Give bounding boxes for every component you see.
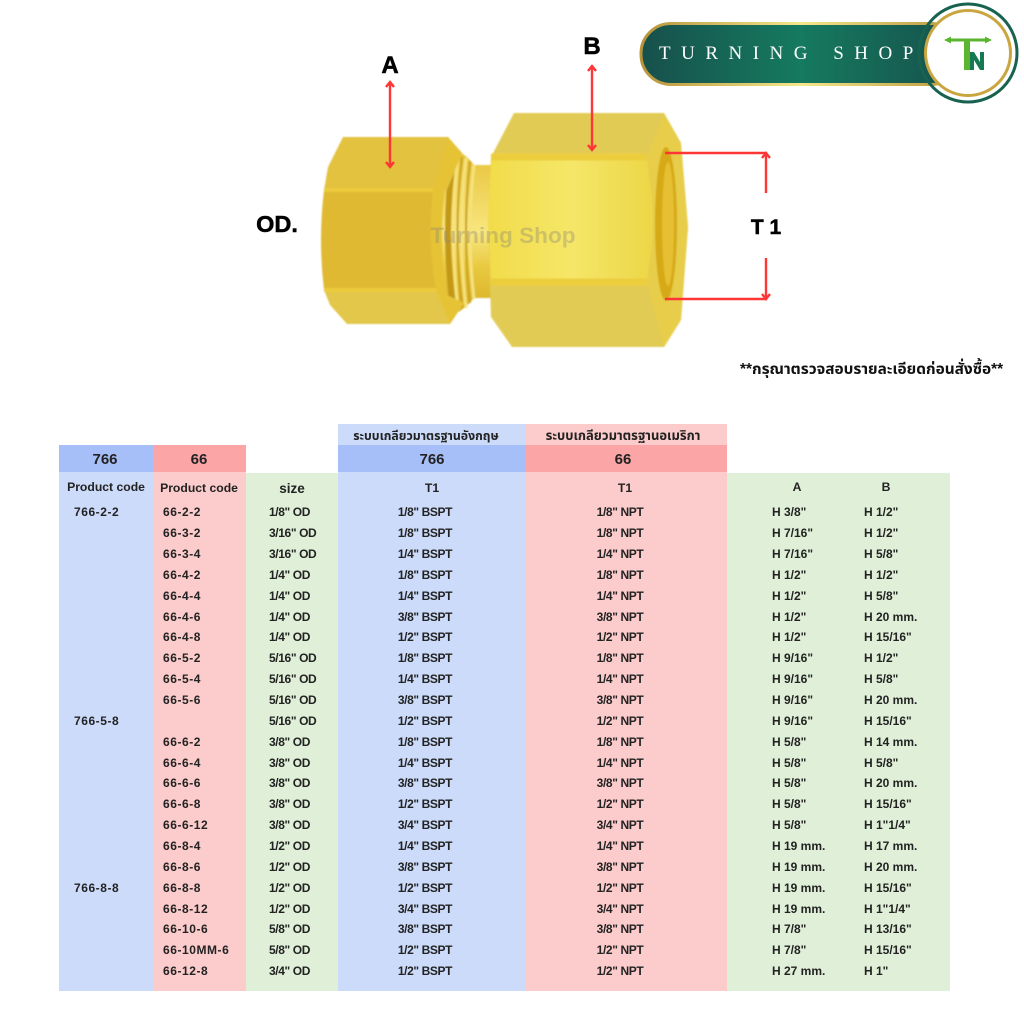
label T1: T 1 (751, 216, 781, 239)
column: A and B dimensions: H 5/8" (772, 818, 806, 832)
column: 66 product code: 66-4-8 (163, 630, 201, 644)
column: size: 3/8" OD (269, 776, 311, 790)
watermark: Turning Shop (430, 223, 576, 248)
column: 766 T1 BSPT: 1/2" BSPT (398, 881, 453, 895)
threaded neck (440, 150, 492, 314)
column: 66 T1 NPT: ระบบเกลียวมาตรฐานอเมริกา (546, 428, 700, 443)
right nut (488, 113, 688, 347)
column: 66 T1 NPT: 1/2" NPT (597, 964, 644, 978)
column: A and B dimensions: H 1/2" (864, 526, 898, 540)
column: A and B dimensions: H 20 mm. (864, 693, 917, 707)
column: 66 product code: 66-6-2 (163, 735, 201, 749)
column: 766 T1 BSPT: 1/4" BSPT (398, 756, 453, 770)
column: 66 T1 NPT: 1/2" NPT (597, 943, 644, 957)
column: A and B dimensions: H 9/16" (772, 672, 813, 686)
label A: A (381, 52, 399, 79)
column: 766 T1 BSPT: 1/2" BSPT (398, 630, 453, 644)
column: 766 T1 BSPT: 1/4" BSPT (398, 839, 453, 853)
column: A and B dimensions: H 15/16" (864, 943, 912, 957)
column: 66 T1 NPT: 1/2" NPT (597, 797, 644, 811)
column: 66 product code: 66-10-6 (163, 922, 208, 936)
column: 66 product code: 66-6-6 (163, 776, 201, 790)
column: size: 3/4" OD (269, 964, 311, 978)
column: 66 product code (153, 445, 246, 991)
column: A and B dimensions: H 1"1/4" (864, 818, 911, 832)
logo emblem (919, 4, 1017, 102)
column: A and B dimensions: H 5/8" (864, 547, 898, 561)
column: A and B dimensions: H 1/2" (864, 505, 898, 519)
column: 66 product code: 66-8-6 (163, 860, 201, 874)
column: 766 T1 BSPT: 1/8" BSPT (398, 651, 453, 665)
column: 66 product code: 66-5-4 (163, 672, 201, 686)
column: 66 product code: 66-10MM-6 (163, 943, 229, 957)
column: 66 T1 NPT: 1/4" NPT (597, 839, 644, 853)
column: 66 T1 NPT: 3/8" NPT (597, 860, 644, 874)
column: 766 product code: Product code (67, 480, 145, 494)
column: A and B dimensions: H 20 mm. (864, 610, 917, 624)
column: A and B dimensions: H 17 mm. (864, 839, 917, 853)
column: 766 T1 BSPT: 1/8" BSPT (398, 505, 453, 519)
column: A and B dimensions: H 20 mm. (864, 860, 917, 874)
column: A and B dimensions: H 19 mm. (772, 902, 825, 916)
column: 66 product code: 66-8-4 (163, 839, 201, 853)
column: A and B dimensions: H 1" (864, 964, 888, 978)
column: A and B dimensions: H 13/16" (864, 922, 912, 936)
column: size: 3/16" OD (269, 547, 317, 561)
column: 66 product code: Product code (160, 481, 238, 495)
column: 66 T1 NPT: 1/2" NPT (597, 630, 644, 644)
column: 66 product code: 66-6-4 (163, 756, 201, 770)
column: A and B dimensions: B (882, 480, 891, 494)
column: 66 T1 NPT: T1 (618, 481, 632, 495)
column: size: 1/4" OD (269, 630, 311, 644)
column: 66 T1 NPT: 3/8" NPT (597, 610, 644, 624)
column: A and B dimensions: H 1/2" (772, 568, 806, 582)
left nut (321, 137, 464, 324)
column: size: size (279, 481, 305, 496)
column: 766 T1 BSPT: T1 (425, 481, 439, 495)
column: 766 T1 BSPT: 3/4" BSPT (398, 902, 453, 916)
column: 766 T1 BSPT: ระบบเกลียวมาตรฐานอังกฤษ (353, 429, 499, 443)
column: A and B dimensions: H 1/2" (772, 610, 806, 624)
column: 66 T1 NPT: 1/8" NPT (597, 735, 644, 749)
column: 766 product code: 766-2-2 (74, 505, 119, 519)
column: 766 T1 BSPT: 1/2" BSPT (398, 714, 453, 728)
column: 66 T1 NPT: 1/8" NPT (597, 651, 644, 665)
logo (641, 4, 1017, 102)
column: 766 T1 BSPT: 766 (419, 451, 445, 468)
column: 766 T1 BSPT: 1/8" BSPT (398, 735, 453, 749)
column: 766 product code: 766 (92, 451, 118, 468)
column: size: 1/4" OD (269, 610, 311, 624)
column: A and B dimensions: H 19 mm. (772, 860, 825, 874)
column: A and B dimensions: H 1/2" (864, 651, 898, 665)
column: 766 T1 BSPT: 3/8" BSPT (398, 610, 453, 624)
column: A and B dimensions: H 5/8" (772, 735, 806, 749)
column: A and B dimensions: H 15/16" (864, 881, 912, 895)
column: 766 T1 BSPT: 3/8" BSPT (398, 776, 453, 790)
column: 766 T1 BSPT (338, 424, 525, 991)
column: 766 T1 BSPT: 1/4" BSPT (398, 547, 453, 561)
column: 66 product code: 66-5-2 (163, 651, 201, 665)
column: 766 T1 BSPT: 1/8" BSPT (398, 568, 453, 582)
column: size: 1/2" OD (269, 860, 311, 874)
column: 66 product code: 66-8-12 (163, 902, 208, 916)
label B: B (583, 33, 601, 60)
column: A and B dimensions: H 1/2" (772, 589, 806, 603)
column: A and B dimensions: H 14 mm. (864, 735, 917, 749)
column: 66 product code: 66-2-2 (163, 505, 201, 519)
column: 766 T1 BSPT: 1/8" BSPT (398, 526, 453, 540)
column: size: 1/2" OD (269, 839, 311, 853)
column: A and B dimensions: H 15/16" (864, 630, 912, 644)
logo pill (641, 24, 961, 84)
column: size: 1/2" OD (269, 881, 311, 895)
column: 766 T1 BSPT: 3/8" BSPT (398, 922, 453, 936)
column: size: 1/4" OD (269, 568, 311, 582)
column: A and B dimensions: H 19 mm. (772, 881, 825, 895)
arrow T1 (665, 153, 770, 299)
column: size: 3/8" OD (269, 797, 311, 811)
column: 766 T1 BSPT: 1/4" BSPT (398, 589, 453, 603)
column: A and B dimensions: H 7/16" (772, 547, 813, 561)
logo text: TURNING SHOP (659, 43, 924, 64)
column: 66 product code: 66-3-2 (163, 526, 201, 540)
column: A and B dimensions: H 7/8" (772, 922, 806, 936)
column: A and B dimensions: H 19 mm. (772, 839, 825, 853)
column: 66 T1 NPT: 1/4" NPT (597, 672, 644, 686)
column: 66 product code: 66-4-2 (163, 568, 201, 582)
column: A and B dimensions: H 7/8" (772, 943, 806, 957)
column: A and B dimensions: H 7/16" (772, 526, 813, 540)
column: A and B dimensions: H 5/8" (864, 672, 898, 686)
column: A and B dimensions: H 3/8" (772, 505, 806, 519)
column: A and B dimensions: H 27 mm. (772, 964, 825, 978)
column: 66 product code: 66-5-6 (163, 693, 201, 707)
column: size: 5/16" OD (269, 651, 317, 665)
column: 766 T1 BSPT: 1/2" BSPT (398, 943, 453, 957)
column: size: 1/8" OD (269, 505, 311, 519)
column: size: 5/8" OD (269, 922, 311, 936)
label OD: OD. (256, 211, 298, 237)
column: 66 T1 NPT: 1/8" NPT (597, 568, 644, 582)
column: A and B dimensions: H 1/2" (864, 568, 898, 582)
column: 66 product code: 66-6-8 (163, 797, 201, 811)
column: 66 T1 NPT: 1/2" NPT (597, 881, 644, 895)
column: size: 1/2" OD (269, 902, 311, 916)
column: A and B dimensions: H 1"1/4" (864, 902, 911, 916)
column: 766 product code: 766-8-8 (74, 881, 119, 895)
column: 766 product code (59, 445, 153, 991)
table (59, 424, 950, 991)
column: 66 T1 NPT: 3/8" NPT (597, 776, 644, 790)
column: A and B dimensions: H 9/16" (772, 714, 813, 728)
column: 66 T1 NPT: 3/8" NPT (597, 922, 644, 936)
column: 66 T1 NPT: 1/8" NPT (597, 505, 644, 519)
column: A and B dimensions: H 20 mm. (864, 776, 917, 790)
column: 66 T1 NPT: 1/4" NPT (597, 589, 644, 603)
column: 66 product code: 66-6-12 (163, 818, 208, 832)
column: 66 product code: 66-8-8 (163, 881, 201, 895)
column: 766 T1 BSPT: 3/8" BSPT (398, 860, 453, 874)
column: 766 T1 BSPT: 1/2" BSPT (398, 964, 453, 978)
column: A and B dimensions: A (793, 480, 802, 494)
column: size: 3/16" OD (269, 526, 317, 540)
column: 766 product code: 766-5-8 (74, 714, 119, 728)
column: A and B dimensions: H 5/8" (864, 589, 898, 603)
column: 66 T1 NPT: 3/4" NPT (597, 902, 644, 916)
column: 766 T1 BSPT: 3/4" BSPT (398, 818, 453, 832)
column: size (246, 473, 338, 991)
column: 66 T1 NPT: 1/4" NPT (597, 547, 644, 561)
column: size: 3/8" OD (269, 818, 311, 832)
column: size: 5/16" OD (269, 693, 317, 707)
column: size: 5/8" OD (269, 943, 311, 957)
column: A and B dimensions (727, 473, 950, 991)
column: 66 T1 NPT (525, 424, 727, 991)
column: A and B dimensions: H 1/2" (772, 630, 806, 644)
column: 66 T1 NPT: 66 (615, 451, 631, 468)
arrow B (588, 66, 596, 150)
column: 66 T1 NPT: 1/2" NPT (597, 714, 644, 728)
fitting photo (321, 113, 688, 347)
note: **กรุณาตรวจสอบรายละเอียดก่อนสั่งซื้อ** (740, 358, 1003, 378)
column: A and B dimensions: H 15/16" (864, 797, 912, 811)
column: size: 1/4" OD (269, 589, 311, 603)
column: size: 5/16" OD (269, 714, 317, 728)
column: size: 3/8" OD (269, 756, 311, 770)
column: size: 5/16" OD (269, 672, 317, 686)
column: 66 product code: 66 (191, 451, 207, 468)
column: A and B dimensions: H 9/16" (772, 693, 813, 707)
column: 66 product code: 66-3-4 (163, 547, 201, 561)
column: 66 T1 NPT: 3/4" NPT (597, 818, 644, 832)
column: 66 T1 NPT: 1/4" NPT (597, 756, 644, 770)
column: A and B dimensions: H 15/16" (864, 714, 912, 728)
column: 66 T1 NPT: 1/8" NPT (597, 526, 644, 540)
arrow A (386, 82, 394, 167)
column: 66 T1 NPT: 3/8" NPT (597, 693, 644, 707)
column: A and B dimensions: H 5/8" (772, 797, 806, 811)
column: 766 T1 BSPT: 3/8" BSPT (398, 693, 453, 707)
column: A and B dimensions: H 5/8" (772, 776, 806, 790)
column: size: 3/8" OD (269, 735, 311, 749)
column: 766 T1 BSPT: 1/2" BSPT (398, 797, 453, 811)
column: 66 product code: 66-4-6 (163, 610, 201, 624)
column: 766 T1 BSPT: 1/4" BSPT (398, 672, 453, 686)
column: A and B dimensions: H 9/16" (772, 651, 813, 665)
column: 66 product code: 66-12-8 (163, 964, 208, 978)
column: A and B dimensions: H 5/8" (772, 756, 806, 770)
column: A and B dimensions: H 5/8" (864, 756, 898, 770)
column: 66 product code: 66-4-4 (163, 589, 201, 603)
